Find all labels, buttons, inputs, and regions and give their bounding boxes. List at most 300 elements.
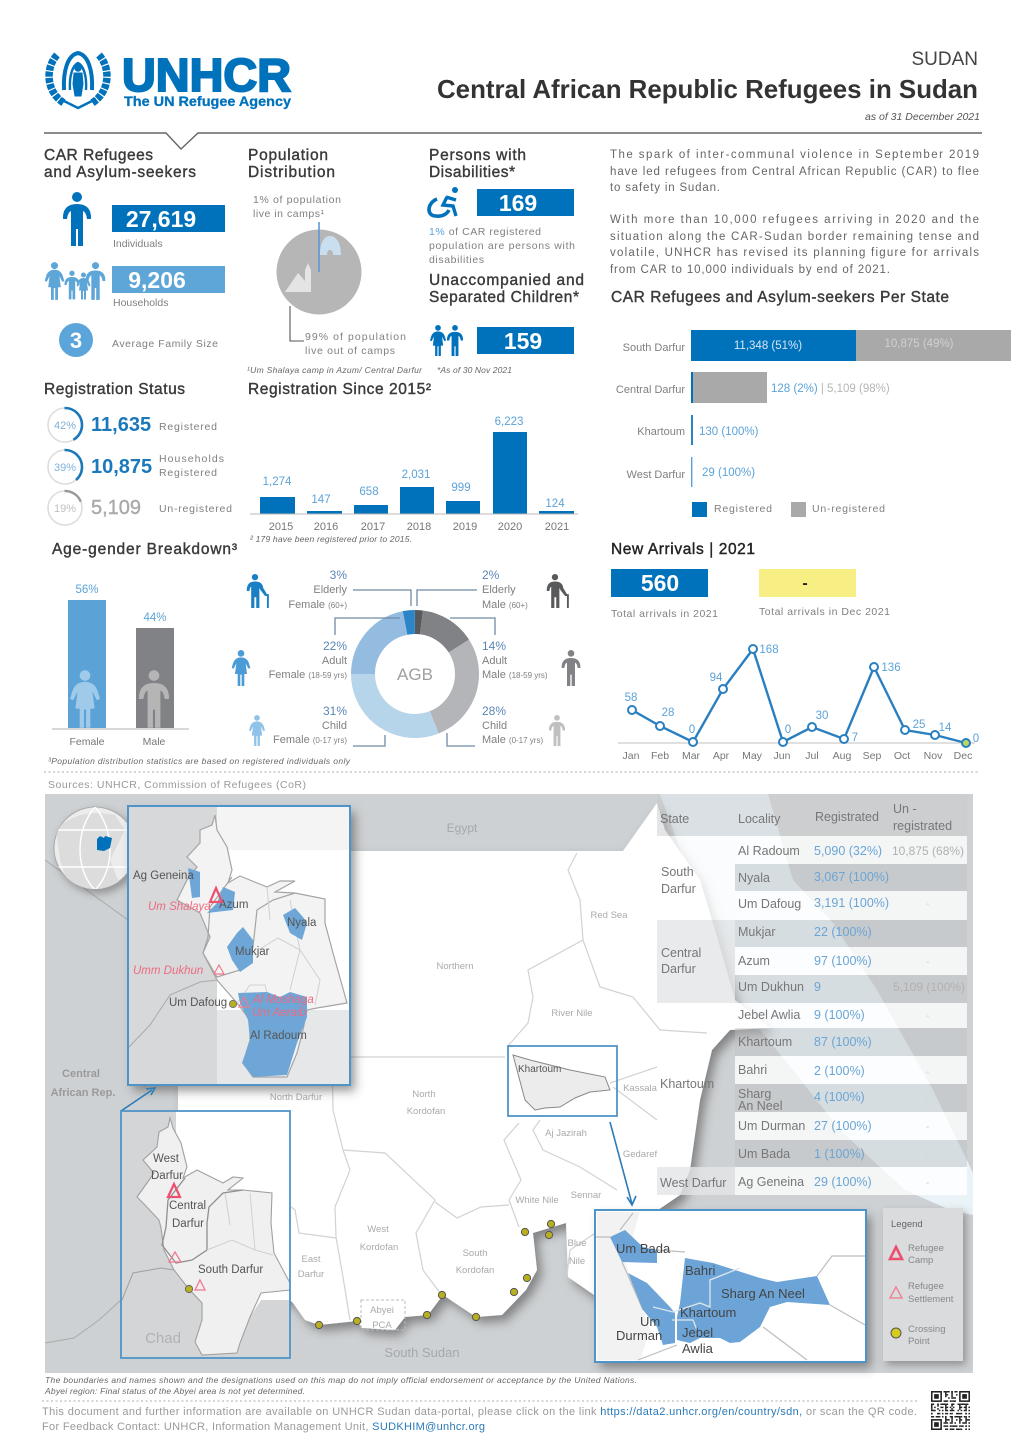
footnote: ³Population distribution statistics are based on registered individuals only [48, 756, 351, 766]
stat: average family size [59, 323, 218, 357]
label: child female [273, 704, 347, 746]
stat: average family size: Average Family Size [112, 338, 218, 350]
locality labels: Umm Dukhun [133, 965, 203, 977]
registered column: 5,090 (32%) [814, 844, 882, 858]
un-registered column: - [926, 1093, 929, 1104]
registered column: 97 (100%) [814, 954, 872, 968]
Egypt and other labels: African Rep. [51, 1087, 115, 1099]
icon: elderly male [547, 574, 569, 608]
bar: male [136, 612, 174, 748]
Abyei dashed area [361, 1300, 405, 1331]
state labels: Darfur [151, 1170, 183, 1182]
donut chart [363, 622, 467, 726]
panel: map [45, 794, 973, 1373]
legend: crossing point: Crossing [908, 1324, 946, 1335]
row: South Darfur: South Darfur [623, 342, 685, 354]
state labels: South Darfur [198, 1264, 263, 1276]
un-registered column: 5,109 (100%) [893, 980, 965, 994]
label: child male: Child [482, 720, 507, 732]
un-registered column: - [926, 1038, 929, 1049]
state labels: Central [169, 1200, 206, 1212]
registered column: 4 (100%) [814, 1090, 865, 1104]
stat: registered [48, 408, 217, 442]
footnote: ² 179 have been registered prior to 2015. [250, 534, 412, 544]
Egypt and other labels: Kordofan [456, 1265, 494, 1276]
state labels: West [153, 1153, 180, 1165]
arrow to Darfur inset [121, 1088, 155, 1111]
legend: refugee settlement: Refugee [908, 1281, 944, 1292]
Egypt and other labels: Gedaref [623, 1149, 658, 1160]
sea [660, 794, 973, 1215]
stat: households [112, 266, 225, 309]
Egypt and other labels: East [301, 1254, 321, 1265]
Egypt and other labels: River Nile [551, 1008, 593, 1019]
heading: CAR Refugees [44, 147, 153, 164]
map background [45, 794, 973, 1373]
stat: registered: Registered [159, 421, 217, 433]
border with Chad [45, 860, 128, 1343]
month labels [623, 750, 972, 762]
Egypt and other labels: Kassala [623, 1083, 658, 1094]
label: adult female: Female (18-59 yrs) [269, 669, 347, 681]
locality labels: Azum [219, 899, 248, 911]
crossing points [315, 1220, 555, 1329]
stat: 169: 169 [499, 190, 537, 216]
locality column [738, 844, 805, 1189]
panel: registration since 2015 [248, 381, 578, 544]
heading: Population [248, 147, 328, 164]
panel: unaccompanied and separated children [429, 272, 584, 356]
state labels: Darfur [172, 1218, 204, 1230]
title: Central African Republic Refugees in Sudan [437, 74, 978, 104]
registered column: 87 (100%) [814, 1035, 872, 1049]
axis [52, 728, 189, 730]
header [44, 49, 982, 149]
panel: intro text: The spark of inter-communal violence in September 2019 [610, 149, 979, 161]
point values: 0 [689, 724, 695, 736]
stat: total arrivals: Total arrivals in 2021 [611, 608, 718, 620]
Egypt and other labels: White Nile [515, 1195, 559, 1206]
icon: globe [50, 807, 140, 890]
footnote: ¹Um Shalaya camp in Azum/ Central Darfur [247, 365, 423, 375]
stat: registered: 11,635 [91, 414, 151, 436]
locality labels: Jebel [682, 1325, 713, 1340]
legend: Registered [714, 503, 772, 515]
Egypt and other labels: South Sudan [384, 1345, 460, 1360]
point values: 94 [710, 672, 723, 684]
note: disabilities [429, 254, 484, 266]
footnote as of: *As of 30 Nov 2021 [437, 365, 512, 375]
un-registered column: - [926, 899, 929, 910]
QR code [931, 1391, 970, 1430]
panel: intro text: situation along the CAR-Sudan border remaining tense and [610, 231, 979, 243]
state labels: Chad [145, 1330, 181, 1347]
label: elderly female: 3% [330, 568, 347, 582]
locality column: Um Dafoug [738, 897, 801, 911]
bar values: 6,223 [495, 416, 523, 428]
label: elderly male: Elderly [482, 584, 516, 596]
panel: intro text: from CAR to 10,000 individuals by end of 2021. [610, 264, 890, 276]
markers [210, 888, 249, 1008]
leader line [290, 306, 304, 341]
panel: intro text: have led refugees from Central African Republic (CAR) to flee [610, 166, 979, 178]
row: Central Darfur [616, 372, 890, 403]
stat: arrivals in December: - [802, 575, 808, 592]
label: elderly male [482, 568, 528, 611]
locality labels: Awlia [682, 1341, 714, 1356]
table header: Un - [893, 802, 917, 816]
x axis years: 2018 [407, 521, 431, 533]
label: elderly male: 2% [482, 568, 500, 582]
row: South Darfur: 10,875 (49%) [884, 338, 954, 350]
x axis years: 2019 [453, 521, 477, 533]
label: adult male: 14% [482, 639, 506, 653]
point values: 58 [625, 692, 637, 704]
row: Khartoum: Khartoum [637, 426, 685, 438]
heading line 2: Disabilities* [429, 164, 515, 181]
month labels: Aug [833, 750, 851, 762]
Egypt and other labels: West [367, 1224, 389, 1235]
Egypt and other labels: Aj Jazirah [545, 1128, 587, 1139]
label: child male [482, 704, 543, 746]
highlighted localities [188, 868, 307, 1077]
x axis years: 2015 [269, 521, 293, 533]
locality labels: Um [640, 1314, 660, 1329]
Abyei dashed area: PCA [372, 1320, 392, 1331]
note: population are persons with [429, 240, 575, 252]
label: adult male [482, 639, 548, 681]
legend: Un-registered [812, 503, 885, 515]
leader lines [335, 590, 495, 746]
legend [692, 502, 885, 517]
locality labels: Durman [616, 1328, 662, 1343]
table header: Locality [738, 812, 781, 826]
legend: Legend [891, 1219, 923, 1230]
row: West Darfur: 29 (100%) [702, 467, 755, 479]
Darfur outline [137, 1118, 290, 1355]
inset: states of Darfur [121, 1111, 290, 1358]
Egypt and other labels: Sennar [571, 1190, 601, 1201]
month labels: Sep [863, 750, 881, 762]
un-registered column: - [926, 873, 929, 884]
row: Khartoum: 130 (100%) [699, 426, 759, 438]
bar: female: 56% [75, 584, 99, 596]
un-registered column: - [926, 1178, 929, 1189]
locality labels: Sharg An Neel [721, 1286, 805, 1301]
locality labels: Um Aeraib [252, 1007, 306, 1019]
locality labels: Um Shalaya [148, 901, 211, 913]
un-registered column: - [926, 1067, 929, 1078]
un-registered column: - [926, 957, 929, 968]
Egypt and other labels: Kordofan [407, 1106, 445, 1117]
point values: 0 [973, 733, 979, 745]
label: adult female: 22% [323, 639, 347, 653]
month labels: Apr [713, 750, 730, 762]
panel: population distribution [247, 147, 512, 375]
row: South Darfur: 11,348 (51%) [734, 340, 802, 352]
x axis years: 2016 [314, 521, 338, 533]
callout: in camps: live in camps¹ [253, 208, 324, 220]
panel: intro text [610, 149, 979, 276]
bar chart [250, 432, 578, 514]
bar values: 124 [545, 498, 565, 510]
Sudan territory [178, 803, 770, 1330]
stat: 159: 159 [504, 328, 542, 354]
label: child female: Child [322, 720, 347, 732]
table header [660, 802, 952, 833]
legend: crossing point: Point [908, 1336, 930, 1347]
icon: camp shelter [320, 236, 341, 255]
heading: New Arrivals | 2021 [611, 541, 755, 558]
bar: female [68, 584, 106, 748]
locality labels: Bahri [685, 1263, 715, 1278]
stat: households registered [48, 450, 224, 484]
Central Darfur boundary [203, 877, 295, 977]
Egypt and other labels: South [463, 1248, 487, 1259]
panel: intro text: volatile, UNHCR has revised its planning figure for arrivals [610, 247, 979, 259]
panel: intro text: With more than 10,000 refugees arriving in 2020 and the [610, 214, 979, 226]
point values: 0 [785, 724, 791, 736]
month labels: Dec [954, 750, 972, 762]
legend: refugee camp [890, 1243, 944, 1266]
stat: total arrivals [611, 569, 718, 620]
registered column: 27 (100%) [814, 1119, 872, 1133]
stat: total arrivals: 560 [641, 570, 679, 596]
stat: households: Households [113, 297, 168, 309]
callout: in camps: 1% of population [253, 194, 341, 206]
state column: West Darfur [660, 1176, 726, 1190]
inset: Darfur localities [128, 806, 350, 1085]
label: adult male: Male (18-59 yrs) [482, 669, 548, 681]
un-registered column: 10,875 (68%) [892, 844, 964, 858]
stat: un-registered: 5,109 [91, 497, 141, 519]
stat: households registered: 10,875 [91, 456, 152, 478]
stat: households registered: Registered [159, 467, 217, 479]
stat: 159 [477, 327, 574, 354]
stat: households registered: Households [159, 453, 224, 465]
state labels [145, 1153, 263, 1347]
stat: 169 [477, 189, 574, 216]
footer text: For Feedback Contact: UNHCR, Information Management Unit, SUDKHIM@unhcr.org [42, 1421, 485, 1433]
row: West Darfur: West Darfur [627, 469, 685, 481]
state column: Central [661, 946, 701, 960]
icon: person [63, 192, 91, 246]
locality column: Azum [738, 954, 770, 968]
sources: Sources: UNHCR, Commission of Refugees (CoR) [48, 779, 306, 791]
Egypt and other labels: Blue [567, 1238, 587, 1249]
label: child female: 31% [323, 704, 347, 718]
stat: un-registered: Un-registered [159, 503, 232, 515]
month labels: Mar [682, 750, 701, 762]
month labels: May [742, 750, 763, 762]
icon: laurel and sheltering hands emblem [49, 53, 107, 108]
date: as of 31 December 2021 [865, 111, 980, 123]
heading line 2: Separated Children* [429, 289, 579, 306]
label: child female: Female (0-17 yrs) [273, 734, 347, 746]
Egypt and other labels [51, 821, 658, 1360]
stat: individuals: 27,619 [126, 206, 196, 232]
header rule with notch [44, 133, 982, 149]
markers [628, 645, 970, 747]
footer text: This document and further information are available on UNHCR Sudan data-portal, please click on the link https://data2.unhcr.org/en/country/sdn, or scan the QR code. [42, 1406, 917, 1418]
bar: female: Female [69, 736, 105, 748]
registered column: 3,067 (100%) [814, 870, 889, 884]
point values [625, 644, 979, 745]
heading: Age-gender Breakdown³ [52, 541, 237, 558]
callout: out of camps [305, 331, 406, 357]
heading: Registration Since 2015² [248, 381, 431, 398]
state column: Khartoum [660, 1077, 714, 1091]
panel: refugees and asylum seekers [44, 147, 225, 357]
panel: persons with disabilities [429, 147, 575, 266]
locality labels: Mukjar [235, 946, 270, 958]
month labels: Jun [774, 750, 791, 762]
icon: houses [285, 263, 311, 292]
row: Central Darfur: 128 (2%) | 5,109 (98%) [771, 383, 890, 395]
panel: registration status [44, 381, 232, 525]
heading line 2: Distribution [248, 164, 335, 181]
icon: adult male [562, 650, 580, 686]
label: adult male: Adult [482, 655, 507, 667]
state column: Darfur [661, 882, 696, 896]
registered column: 9 (100%) [814, 1008, 865, 1022]
legend: refugee settlement [890, 1281, 954, 1305]
stat: average family size: 3 [70, 328, 82, 353]
locality labels: Um Bada [616, 1241, 671, 1256]
panel: age-gender breakdown [48, 541, 580, 766]
note: 1% of CAR registered [429, 226, 541, 238]
point values: 25 [913, 719, 925, 731]
stat: un-registered: 19% [54, 503, 76, 515]
panel: new arrivals [611, 541, 979, 762]
heading: CAR Refugees and Asylum-seekers Per State [611, 289, 949, 306]
month labels: Oct [894, 750, 910, 762]
label: child male: Male (0-17 yrs) [482, 734, 543, 746]
Egypt and other labels: Nile [569, 1256, 585, 1267]
heading line 2: and Asylum-seekers [44, 164, 196, 181]
Egypt and other labels: Egypt [447, 821, 478, 835]
locality labels [616, 1241, 805, 1356]
table: refugees by locality [657, 794, 967, 1195]
locality column: Ag Geneina [738, 1175, 804, 1189]
icon: elderly female [247, 574, 269, 608]
callout: out of camps: 99% of population [305, 331, 406, 343]
stat: un-registered [48, 491, 232, 525]
point values: 168 [759, 644, 779, 656]
map disclaimer [44, 1375, 637, 1396]
point values: 30 [816, 710, 828, 722]
label: elderly male: Male (60+) [482, 599, 528, 611]
panel: intro text: to safety in Sudan. [610, 182, 720, 194]
locality column: Mukjar [738, 925, 776, 939]
border line [128, 980, 217, 1048]
Egypt and other labels: North Darfur [270, 1092, 322, 1103]
x axis years: 2017 [361, 521, 385, 533]
icon: children [430, 325, 463, 356]
note [429, 226, 575, 266]
stat: individuals: Individuals [113, 238, 163, 250]
inset: Khartoum localities [595, 1210, 866, 1362]
map disclaimer: The boundaries and names shown and the designations used on this map do not imply official endorsement or acceptance by the United Nations. [45, 1375, 637, 1385]
table header: Registrated [815, 810, 879, 824]
markers [168, 1184, 205, 1293]
state column: South [661, 865, 694, 879]
legend: crossing point [891, 1324, 946, 1347]
legend: refugee settlement: Settlement [908, 1294, 954, 1305]
callout: out of camps: live out of camps [305, 345, 395, 357]
un-registered column: - [926, 928, 929, 939]
icon: child male [549, 715, 565, 746]
un-registered column: - [926, 1011, 929, 1022]
bar: male: Male [143, 736, 166, 748]
label: elderly female: Female (60+) [288, 599, 347, 611]
highlighted localities [610, 1230, 830, 1345]
locality labels: Um Dafoug [169, 997, 227, 1009]
locality column: Jebel Awlia [738, 1008, 800, 1022]
locality column: An Neel [738, 1099, 782, 1113]
month labels: Jan [623, 750, 640, 762]
outside boundaries [595, 1213, 865, 1360]
locality column: Nyala [738, 871, 770, 885]
heading: Persons with [429, 147, 526, 164]
Egypt and other labels: Kordofan [360, 1242, 398, 1253]
registered column [814, 844, 889, 1189]
locality labels: Khartoum [680, 1305, 736, 1320]
stat: arrivals in December [759, 569, 890, 618]
locality labels: Nyala [287, 917, 317, 929]
bar values: 1,274 [263, 476, 292, 488]
point values: 7 [852, 732, 858, 744]
point values: 136 [881, 662, 901, 674]
x axis years: 2020 [498, 521, 522, 533]
bar values [263, 416, 565, 510]
pie chart [276, 222, 362, 314]
Darfur outline [177, 815, 347, 1077]
locality labels: Al Radoum [250, 1030, 307, 1042]
un-registered column: - [926, 1122, 929, 1133]
stat: individuals [112, 205, 225, 250]
locality column: Bahri [738, 1063, 767, 1077]
bar values: 2,031 [402, 469, 430, 481]
heading: Registration Status [44, 381, 185, 398]
Central Darfur boundary [162, 1178, 243, 1263]
callout: in camps [253, 194, 341, 220]
registered column: 29 (100%) [814, 1175, 872, 1189]
locality column: Al Radoum [738, 844, 800, 858]
point values: 14 [939, 722, 952, 734]
bar: male: 44% [143, 612, 167, 624]
Egypt and other labels: Darfur [298, 1269, 324, 1280]
table header: State [660, 812, 689, 826]
legend: refugee camp: Refugee [908, 1243, 944, 1254]
table header: registrated [893, 819, 952, 833]
legend: refugee camp: Camp [908, 1255, 933, 1266]
label: adult female: Adult [322, 655, 347, 667]
un-registered column [892, 844, 965, 1189]
bar values: 147 [311, 494, 331, 506]
month labels: Jul [805, 750, 819, 762]
registered column: 1 (100%) [814, 1147, 865, 1161]
panel: refugees per state [611, 289, 1011, 517]
locality column: Um Durman [738, 1119, 805, 1133]
box: Khartoum locator [508, 1046, 617, 1116]
month labels: Nov [924, 750, 943, 762]
stat: arrivals in December: Total arrivals in Dec 2021 [759, 606, 890, 618]
bar values: 999 [451, 482, 471, 494]
map disclaimer: Abyei region: Final status of the Abyei area is not yet determined. [44, 1386, 305, 1396]
locality labels: Al Moshaga [252, 994, 314, 1006]
icon: child female [249, 715, 265, 746]
